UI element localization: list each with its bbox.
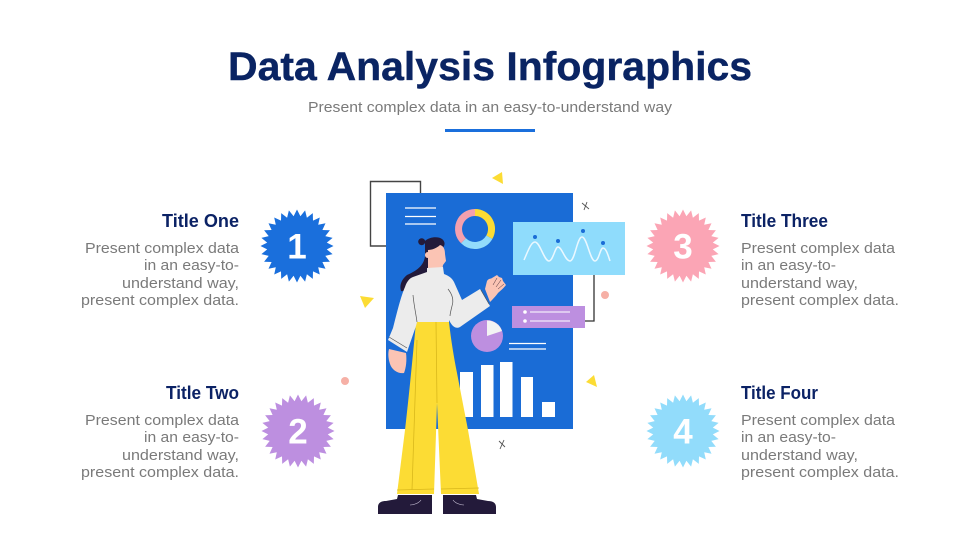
text block: title three: present complex data. bbox=[741, 293, 899, 309]
panel: title two bbox=[81, 383, 334, 481]
right shoe bbox=[443, 495, 496, 514]
donut chart bbox=[459, 212, 492, 246]
text block: title one: Present complex data bbox=[85, 241, 240, 257]
frame behind board bbox=[370, 182, 420, 246]
face and neck bbox=[425, 245, 446, 271]
text block: title one: understand way, bbox=[122, 276, 239, 292]
badge: number 1: 1 bbox=[287, 228, 307, 266]
pie chart bbox=[471, 320, 503, 352]
text lines top bbox=[405, 208, 436, 224]
woman figure bbox=[378, 237, 506, 514]
text block: title four: present complex data. bbox=[741, 465, 899, 481]
text block: title four: Present complex data bbox=[741, 413, 896, 429]
text block: title one bbox=[81, 241, 240, 309]
badge: number 4: 4 bbox=[673, 412, 693, 452]
decorative triangles bbox=[360, 172, 597, 387]
trousers bbox=[397, 322, 479, 494]
hair bbox=[400, 237, 445, 291]
text block: title two: understand way, bbox=[122, 448, 239, 464]
title underline bbox=[445, 129, 535, 132]
badge: number 2: 2 bbox=[288, 412, 308, 452]
panel: title four bbox=[646, 383, 899, 481]
left hand bbox=[388, 349, 406, 373]
badge: number 3: 3 bbox=[673, 228, 693, 266]
panel: title three bbox=[646, 210, 899, 309]
text block: title one: in an easy-to- bbox=[144, 258, 239, 274]
badge: number 1 bbox=[260, 210, 334, 282]
heading: title three: Title Three bbox=[741, 211, 828, 231]
text block: title two bbox=[81, 413, 240, 481]
text lines lower bbox=[509, 344, 546, 349]
text block: title three: understand way, bbox=[741, 276, 858, 292]
text block: title two: in an easy-to- bbox=[144, 430, 239, 446]
right hand bbox=[485, 275, 506, 302]
heading: title one: Title One bbox=[162, 211, 239, 231]
title: Data Analysis Infographics bbox=[228, 45, 752, 89]
text block: title one: present complex data. bbox=[81, 293, 239, 309]
bar chart bbox=[460, 362, 555, 417]
heading: title four: Title Four bbox=[741, 383, 818, 403]
left shoe bbox=[378, 495, 432, 514]
blue data board bbox=[386, 193, 573, 429]
text block: title four: understand way, bbox=[741, 448, 858, 464]
connector line bbox=[585, 275, 594, 321]
sweater bbox=[388, 267, 490, 352]
decorative dots bbox=[341, 291, 609, 385]
decorative crosses bbox=[499, 202, 589, 449]
text block: title four: in an easy-to- bbox=[741, 430, 836, 446]
line chart card bbox=[513, 222, 625, 275]
illustration: analyst with data board bbox=[341, 172, 625, 514]
badge: number 2 bbox=[262, 394, 334, 468]
subtitle: Present complex data in an easy-to-understand way bbox=[308, 99, 673, 116]
text block: title two: Present complex data bbox=[85, 413, 240, 429]
text block: title three bbox=[741, 241, 899, 309]
badge: number 4 bbox=[646, 394, 720, 468]
text block: title three: Present complex data bbox=[741, 241, 896, 257]
text block: title four bbox=[741, 413, 899, 481]
text block: title two: present complex data. bbox=[81, 465, 239, 481]
heading: title two: Title Two bbox=[166, 383, 239, 403]
panel: title one bbox=[81, 210, 334, 309]
badge: number 3 bbox=[646, 210, 720, 282]
text block: title three: in an easy-to- bbox=[741, 258, 836, 274]
purple list card bbox=[512, 306, 585, 328]
